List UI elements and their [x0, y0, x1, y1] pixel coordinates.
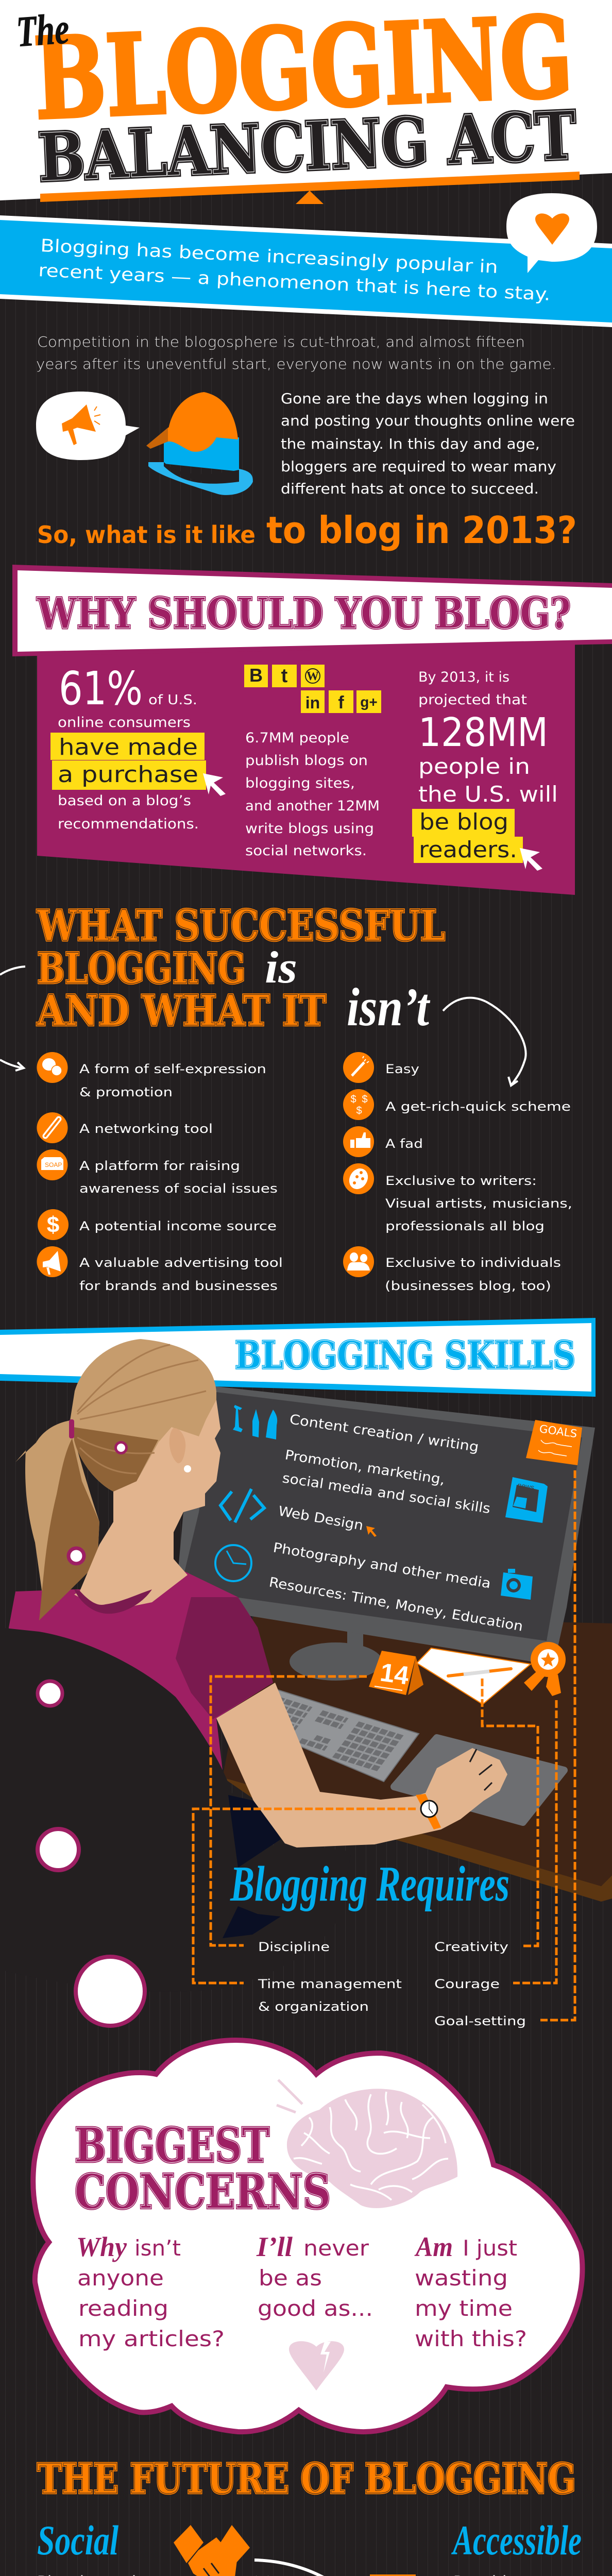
- illustration: calendar: [369, 1651, 423, 1695]
- icons: blogging platforms and social networks: in: [305, 693, 320, 712]
- paragraph: gone are the days: different hats at once to succeed.: [281, 480, 539, 497]
- section banner: [12, 565, 612, 656]
- item: [79, 1159, 278, 1196]
- heading: what successful blogging is and what it isn't: isn’t: [347, 977, 430, 1037]
- illustration: calendar: 14: [378, 1657, 411, 1690]
- question heading: So, what is it like: [37, 521, 256, 549]
- icon: dollars: $: [362, 1094, 368, 1105]
- item: professionals all blog: [385, 1219, 545, 1233]
- icon: people: [343, 1246, 374, 1277]
- concern: why isn't anyone reading: my articles?: [78, 2326, 225, 2351]
- watch: [416, 1794, 441, 1829]
- item: awareness of social issues: [79, 1181, 278, 1196]
- concern: why isn't anyone reading: anyone: [77, 2265, 164, 2291]
- future: social: Social: [37, 2517, 118, 2564]
- item: [385, 1174, 572, 1233]
- stat column: 61 percent: have made: [59, 734, 198, 760]
- illustration: keyboard: [254, 1690, 419, 1782]
- icon: clock: [215, 1545, 251, 1581]
- neck and face: [74, 1391, 220, 1612]
- stat column: 6.7MM people: [245, 730, 380, 859]
- concern: am I just wasting my time: Am: [414, 2231, 453, 2262]
- paragraph: gone are the days: the mainstay. In this day and age,: [281, 435, 540, 452]
- intro paragraph: competition: [36, 333, 556, 372]
- stat column: 61 percent: online consumers: [58, 715, 191, 731]
- item: Exclusive to writers:: [385, 1174, 537, 1188]
- item: (businesses blog, too): [385, 1279, 551, 1293]
- stat column: 128MM: people in: [418, 754, 530, 779]
- icon: heart speech bubble: [506, 193, 597, 273]
- icons: blogging platforms and social networks: g+: [360, 694, 378, 710]
- sticky note: goals: [526, 1420, 582, 1465]
- item: Easy: [385, 1062, 419, 1076]
- icon: dollar: [38, 1209, 69, 1240]
- heading: biggest concerns: [75, 2117, 331, 2219]
- icon: dollars: $: [350, 1094, 356, 1105]
- stat column: 6.7MM people: publish blogs on: [245, 753, 368, 769]
- icon: soap box: [37, 1149, 68, 1180]
- item: A potential income source: [79, 1219, 277, 1233]
- shirt sleeve: [176, 1597, 273, 1719]
- concern: am I just wasting my time: wasting: [415, 2265, 508, 2291]
- purple stats panel: [37, 644, 575, 895]
- icon: code brackets: [220, 1489, 264, 1522]
- seesaw fulcrum: [296, 191, 324, 204]
- title header: [0, 0, 612, 204]
- heading: biggest concerns: CONCERNS: [75, 2164, 331, 2219]
- play diagram arrows: [254, 2560, 356, 2576]
- heading: what successful blogging is and what it isn't: BLOGGING: [37, 944, 246, 993]
- heading: what successful blogging is and what it isn't: WHAT SUCCESSFUL: [37, 902, 445, 951]
- illustration: award ribbon: [524, 1642, 566, 1696]
- panel: why should you blog: [12, 565, 612, 895]
- illustration: notepad and marker: [417, 1648, 531, 1704]
- paragraph: gone are the days: and posting your thoughts online were: [281, 412, 575, 429]
- item: A get-rich-quick scheme: [385, 1099, 571, 1114]
- icon: megaphone: [37, 1246, 68, 1277]
- future: social: [37, 2517, 170, 2576]
- concern: why isn't anyone reading: isn’t: [134, 2235, 181, 2261]
- item: & promotion: [79, 1085, 173, 1099]
- arrow: to what it isn't: [443, 998, 526, 1086]
- stat column: 128MM: the U.S. will: [418, 782, 558, 807]
- intro text: Blogging has become increasingly popular in: [40, 235, 498, 278]
- icons: blogging platforms and social networks: t: [281, 665, 288, 687]
- icon: brain: [277, 2080, 457, 2208]
- heading: blogging requires: Blogging Requires: [230, 1856, 509, 1912]
- item: [385, 1256, 561, 1293]
- list: what blogging is: [37, 1052, 283, 1293]
- icon: camera: [501, 1569, 533, 1600]
- stat column: 128MM: projected that: [418, 692, 527, 708]
- icon: newspaper: [505, 1477, 548, 1523]
- illustration: woman at the computer: [9, 1339, 273, 1803]
- heading: what successful blogging is and what it isn't: AND WHAT IT: [37, 987, 326, 1036]
- seesaw beam: [40, 172, 580, 202]
- sticky note: goals: GOALS: [538, 1422, 578, 1440]
- ear: [169, 1428, 185, 1463]
- item: [79, 1062, 266, 1099]
- paragraph: gone are the days: [281, 390, 575, 497]
- illustration: arm and hand: [216, 1683, 507, 1848]
- stat column: 128MM: 128MM: [418, 710, 548, 756]
- illustration: desk: [223, 1616, 612, 1902]
- list: blogging requires: [258, 1940, 526, 2028]
- screen list: blogging skills: Resources: Time, Money, Education: [268, 1574, 524, 1635]
- heading: biggest concerns: CONCERNS: [75, 2164, 331, 2219]
- section banner: blogging skills: [0, 1318, 596, 1397]
- item: for brands and businesses: [79, 1279, 278, 1293]
- dashed connector lines: [193, 1470, 575, 2020]
- item: [79, 1256, 283, 1293]
- intro text: recent years — a phenomenon that is here to stay.: [38, 260, 551, 305]
- panel: biggest concerns cloud: [33, 2040, 582, 2432]
- paragraph: gone are the days: Gone are the days when logging in: [281, 390, 548, 407]
- heading: biggest concerns: BIGGEST: [75, 2117, 269, 2173]
- illustration: chair: [0, 1628, 351, 1992]
- icon: palette: [343, 1163, 374, 1194]
- icon: handshake: [174, 2525, 250, 2576]
- heading: what successful blogging is and what it isn't: AND WHAT IT: [37, 987, 326, 1036]
- item: A form of self-expression: [79, 1062, 266, 1076]
- icon: thumbs up: [343, 1126, 374, 1157]
- screen list: blogging skills: Promotion, marketing,: [284, 1447, 446, 1488]
- icon: door with entry arrow: [370, 2574, 431, 2576]
- icons: blogging platforms and social networks: W: [307, 670, 319, 683]
- heading: what successful blogging is and what it isn't: WHAT SUCCESSFUL: [37, 902, 445, 951]
- stat column: 6.7MM people: and another 12MM: [245, 798, 380, 814]
- stat column: 128MM: be blog: [419, 809, 508, 835]
- icon: megaphone speech bubble: [36, 392, 140, 460]
- question heading: [37, 509, 577, 552]
- icon: soap box: SOAP: [45, 1161, 62, 1168]
- stat column: 61 percent: recommendations.: [58, 816, 199, 832]
- icon: chain link: [37, 1112, 68, 1143]
- thought bubbles: [38, 1443, 145, 2026]
- illustration: monitor: [175, 1385, 595, 1681]
- ponytail: [15, 1420, 99, 1620]
- item: A platform for raising: [79, 1159, 240, 1173]
- list: blogging requires: & organization: [258, 1999, 369, 2014]
- concern: why isn't anyone reading: reading: [78, 2296, 168, 2321]
- list: blogging requires: Goal-setting: [434, 2014, 526, 2028]
- stat column: 6.7MM people: write blogs using: [245, 821, 374, 837]
- icon: broken heart: [289, 2341, 344, 2391]
- stat column: 61 percent: a purchase: [58, 761, 198, 788]
- heading: what successful blogging is and what it isn't: is: [265, 943, 297, 993]
- illustration: mouse pad: [394, 1738, 564, 1822]
- heading: biggest concerns: BIGGEST: [75, 2117, 269, 2173]
- stat column: 61 percent: of U.S.: [148, 692, 197, 708]
- list: what blogging isn't: [343, 1052, 572, 1293]
- icon: dollars: $: [356, 1105, 362, 1116]
- heading: what successful blogging is and what it isn't: BLOGGING: [37, 944, 246, 993]
- item: Exclusive to individuals: [385, 1256, 561, 1270]
- concern: why isn't anyone reading: [76, 2231, 225, 2351]
- icon: speech bubbles: [37, 1052, 68, 1083]
- stat column: 6.7MM people: social networks.: [245, 843, 367, 859]
- title script: The: The: [15, 5, 71, 56]
- intro paragraph: competition: years after its uneventful start, everyone now wants in on the game.: [36, 355, 556, 372]
- stat column: 128MM: [412, 669, 558, 871]
- icons: blogging platforms and social networks: f: [338, 693, 344, 713]
- concern: I'll never be as good as: I’ll: [256, 2231, 293, 2262]
- concern: I'll never be as good as: be as: [259, 2265, 322, 2291]
- concern: I'll never be as good as: [256, 2231, 373, 2321]
- icon: newspaper: news: [517, 1481, 535, 1492]
- list: blogging requires: Time management: [258, 1977, 402, 1991]
- list: blogging requires: Courage: [434, 1977, 500, 1991]
- heading: what successful blogging is and what it isn't: [37, 902, 445, 1037]
- icon: dollars: [343, 1089, 374, 1120]
- screen list: blogging skills: social media and social skills: [281, 1470, 491, 1517]
- item: A networking tool: [79, 1122, 213, 1136]
- arrow: to what it is: [0, 967, 25, 1071]
- icon: dollar: $: [47, 1212, 59, 1238]
- icon: web cursor: [366, 1526, 377, 1537]
- question heading: to blog in 2013?: [266, 509, 577, 552]
- icons: blogging platforms and social networks: [244, 665, 381, 713]
- list: blogging requires: Discipline: [258, 1940, 330, 1954]
- icons: blogging platforms and social networks: B: [249, 665, 263, 686]
- item: A fad: [385, 1137, 423, 1151]
- screen list: blogging skills: Photography and other media: [272, 1540, 492, 1592]
- icon: magic wand: [343, 1052, 374, 1083]
- hair tie: [69, 1419, 74, 1438]
- stat column: 61 percent: based on a blog’s: [58, 793, 191, 809]
- stat column: 6.7MM people: blogging sites,: [245, 775, 355, 791]
- intro blue band: [0, 193, 612, 327]
- list: blogging requires: Creativity: [434, 1940, 508, 1954]
- stat column: 61 percent: 61%: [59, 662, 143, 715]
- stat column: 128MM: readers.: [419, 837, 517, 863]
- concern: am I just wasting my time: with this?: [415, 2326, 527, 2351]
- item: Visual artists, musicians,: [385, 1196, 572, 1211]
- shirt: [9, 1569, 273, 1803]
- earring: [184, 1465, 191, 1472]
- illustration: legs: [223, 1795, 281, 1938]
- icon: many hats: [146, 392, 253, 495]
- paragraph: gone are the days: bloggers are required to wear many: [281, 458, 556, 475]
- stat column: 61 percent: [50, 662, 226, 832]
- collar: [74, 1589, 152, 1614]
- concern: I'll never be as good as: good as...: [258, 2296, 373, 2321]
- concern: am I just wasting my time: my time: [415, 2296, 513, 2321]
- stat column: 128MM: By 2013, it is: [418, 669, 509, 685]
- concern: I'll never be as good as: never: [303, 2235, 369, 2261]
- icon: type, pen and brush tools: [233, 1405, 277, 1439]
- stat column: 6.7MM people: 6.7MM people: [245, 730, 349, 746]
- hair: [70, 1339, 216, 1492]
- screen list: blogging skills: [268, 1412, 524, 1635]
- screen list: blogging skills: Web Design: [277, 1503, 364, 1534]
- concern: am I just wasting my time: I just: [463, 2235, 517, 2261]
- intro paragraph: competition: Competition in the blogosphere is cut-throat, and almost fifteen: [37, 333, 525, 350]
- screen list: blogging skills: Content creation / writing: [288, 1412, 480, 1455]
- concern: why isn't anyone reading: Why: [76, 2231, 127, 2262]
- intro text: [38, 235, 551, 305]
- concern: am I just wasting my time: [414, 2231, 527, 2351]
- item: A valuable advertising tool: [79, 1256, 283, 1270]
